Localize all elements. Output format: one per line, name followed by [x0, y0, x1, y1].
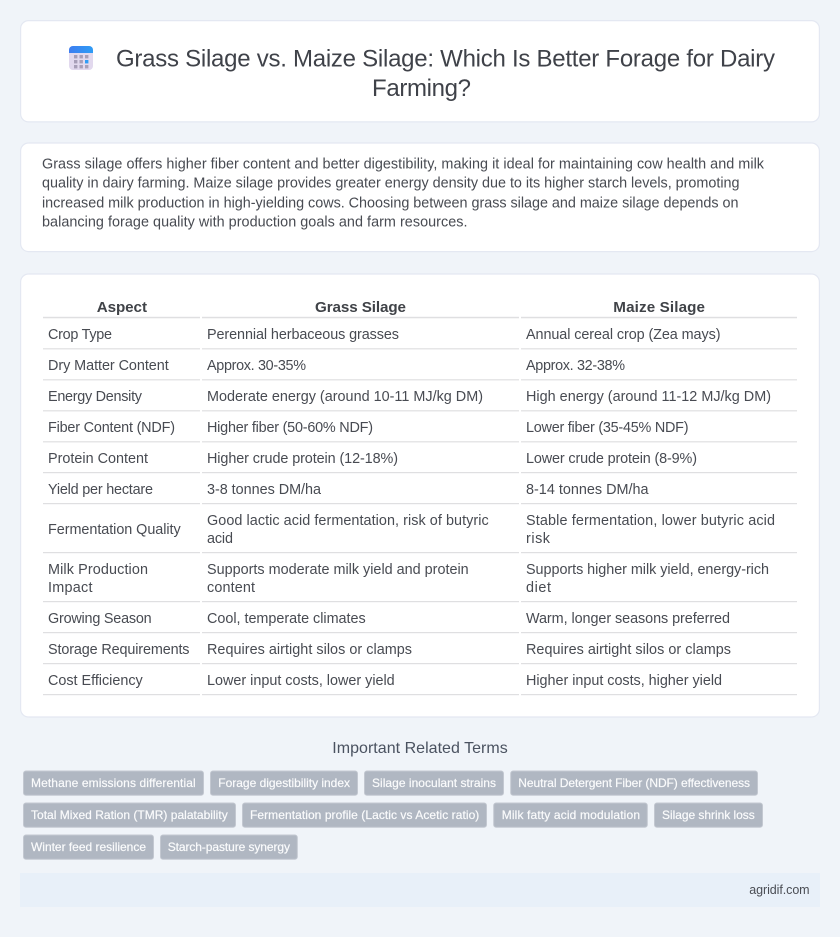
row: fiber: Higher fiber (50-60% NDF) — [207, 420, 373, 436]
row: fermentation: risk — [526, 531, 551, 547]
row: cost: Cost Efficiency — [48, 673, 143, 689]
tag: Milk fatty acid modulation — [502, 808, 640, 822]
row: growing season: Growing Season — [48, 611, 152, 627]
row: energy density — [48, 389, 771, 405]
row: growing season: Warm, longer seasons preferred — [526, 611, 730, 627]
tag — [24, 771, 204, 795]
row: milk production: Supports moderate milk yield and protein — [207, 562, 469, 578]
table header: Aspect — [97, 299, 147, 316]
tag: Neutral Detergent Fiber (NDF) effectiveness — [518, 776, 750, 790]
row: fiber: Fiber Content (NDF) — [48, 420, 175, 436]
row: fiber: Lower fiber (35-45% NDF) — [526, 420, 688, 436]
title — [116, 46, 775, 102]
row: dry matter: Approx. 30-35% — [207, 358, 306, 374]
row: yield: Yield per hectare — [48, 482, 153, 498]
panel: header — [21, 21, 819, 122]
tag: Total Mixed Ration (TMR) palatability — [31, 808, 228, 822]
tag group — [24, 771, 762, 859]
row: fermentation: Fermentation Quality — [48, 522, 181, 538]
row: fermentation: Good lactic acid fermentation, risk of butyric — [207, 513, 489, 529]
row: cost — [48, 673, 722, 689]
row: milk production: content — [207, 580, 255, 596]
tag — [24, 835, 154, 859]
row: growing season — [48, 611, 730, 627]
row: crop type: Annual cereal crop (Zea mays) — [526, 327, 720, 343]
footer: agridif.com — [749, 883, 810, 897]
row: fiber — [48, 420, 688, 436]
intro text: increased milk production in high-yielding cows. Choosing between grass silage and maize silage depends on — [42, 195, 738, 211]
row: energy density: Moderate energy (around 10-11 MJ/kg DM) — [207, 389, 483, 405]
tag: Winter feed resilience — [31, 840, 146, 854]
row: milk production: Supports higher milk yield, energy-rich — [526, 562, 769, 578]
panel: comparison table — [21, 274, 819, 717]
row: protein: Lower crude protein (8-9%) — [526, 451, 697, 467]
table header: Maize Silage — [613, 299, 705, 316]
row: dry matter: Dry Matter Content — [48, 358, 169, 374]
row: dry matter — [48, 358, 625, 374]
tag — [654, 803, 762, 827]
row: milk production — [48, 562, 769, 596]
tag: Forage digestibility index — [218, 776, 350, 790]
row: dry matter: Approx. 32-38% — [526, 358, 625, 374]
row: crop type: Crop Type — [48, 327, 112, 343]
tag — [210, 771, 358, 795]
tag — [242, 803, 486, 827]
intro text — [42, 156, 765, 231]
tag — [160, 835, 297, 859]
row: yield — [48, 482, 648, 498]
row: energy density: Energy Density — [48, 389, 143, 405]
table header: Grass Silage — [315, 299, 406, 316]
tag: Silage inoculant strains — [372, 776, 496, 790]
row: milk production: Impact — [48, 580, 92, 596]
tag — [511, 771, 758, 795]
tag: Starch-pasture synergy — [168, 840, 290, 854]
intro text: Grass silage offers higher fiber content and better digestibility, making it ideal for maintaining cow health and milk — [42, 156, 765, 172]
row: storage: Storage Requirements — [48, 642, 190, 658]
footer — [20, 873, 820, 907]
row: storage: Requires airtight silos or clamps — [526, 642, 731, 658]
row: crop type: Perennial herbaceous grasses — [207, 327, 399, 343]
tag: Fermentation profile (Lactic vs Acetic ratio) — [250, 808, 479, 822]
row: protein: Higher crude protein (12-18%) — [207, 451, 398, 467]
row: fermentation: acid — [207, 531, 233, 547]
intro text: balancing forage quality with production goals and farm resources. — [42, 215, 468, 231]
heading: related terms: Important Related Terms — [332, 740, 508, 757]
row: energy density: High energy (around 11-12 MJ/kg DM) — [526, 389, 771, 405]
row: yield: 3-8 tonnes DM/ha — [207, 482, 321, 498]
panel: intro — [21, 143, 819, 252]
row: fermentation — [48, 513, 775, 547]
tag — [24, 803, 236, 827]
tag: Silage shrink loss — [662, 808, 755, 822]
row: storage — [48, 642, 731, 658]
row: protein: Protein Content — [48, 451, 148, 467]
title: Farming? — [372, 75, 471, 102]
row: crop type — [48, 327, 720, 343]
row: cost: Higher input costs, higher yield — [526, 673, 722, 689]
tag — [364, 771, 504, 795]
row: yield: 8-14 tonnes DM/ha — [526, 482, 648, 498]
row: storage: Requires airtight silos or clamps — [207, 642, 412, 658]
row: milk production: Milk Production — [48, 562, 148, 578]
row: milk production: diet — [526, 580, 551, 596]
row: cost: Lower input costs, lower yield — [207, 673, 395, 689]
tag: Methane emissions differential — [31, 776, 196, 790]
tag — [494, 803, 647, 827]
title: Grass Silage vs. Maize Silage: Which Is Better Forage for Dairy — [116, 46, 775, 72]
row: growing season: Cool, temperate climates — [207, 611, 366, 627]
row: fermentation: Stable fermentation, lower butyric acid — [526, 513, 775, 529]
intro text: quality in dairy farming. Maize silage provides greater energy density due to its higher starch levels, promoting — [42, 176, 740, 192]
row: protein — [48, 451, 697, 467]
table header — [97, 299, 705, 316]
icon: calendar — [69, 46, 93, 70]
